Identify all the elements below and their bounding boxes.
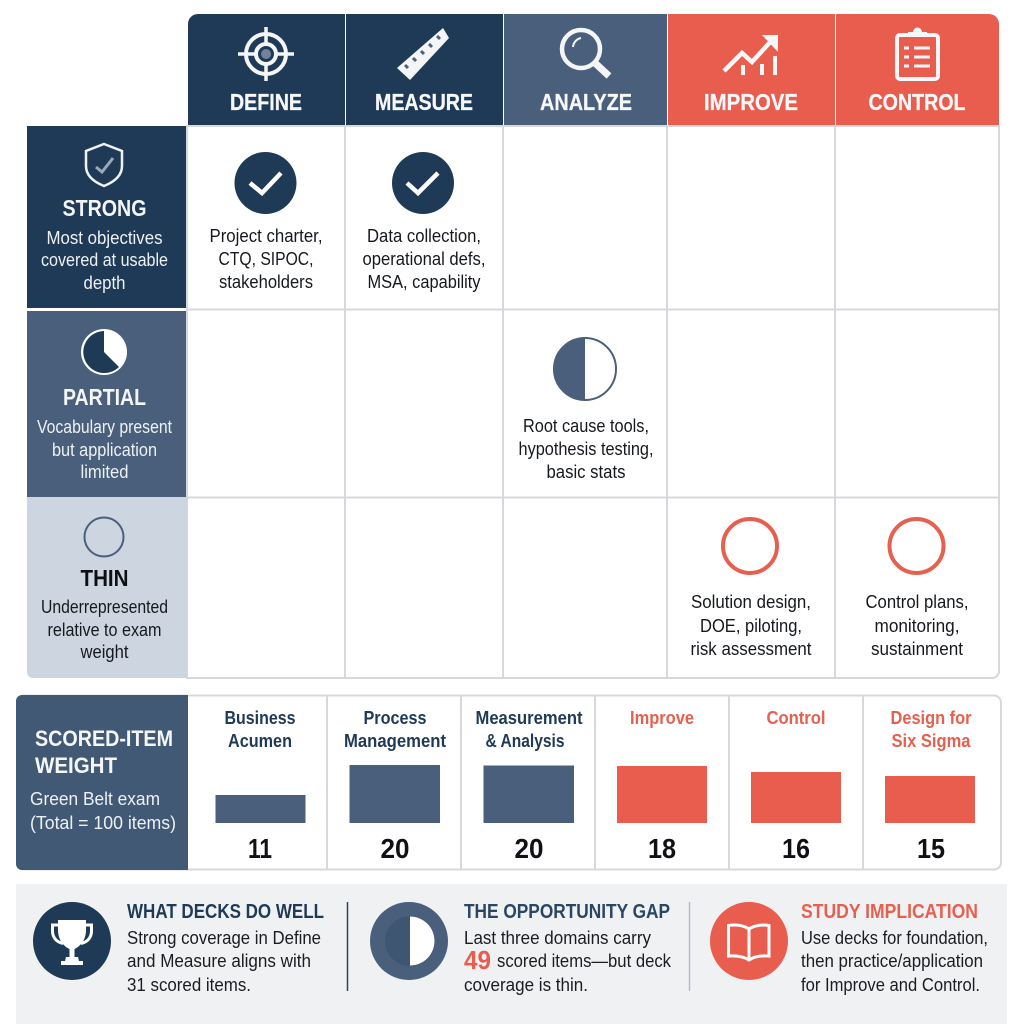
icon: shield [86,144,122,186]
header: control: CONTROL [868,89,966,115]
row label: strong: depth [84,273,126,293]
bar: design for six sigma [885,707,975,864]
bar: business acumen [216,707,306,864]
weight heading: Green Belt exam [30,789,160,809]
takeaway: what decks do well: Strong coverage in Define [127,927,321,948]
header: analyze [504,14,667,125]
weight heading [16,695,188,870]
icon: half circle [370,902,448,980]
bar: measurement and analysis: 20 [514,833,544,864]
takeaway: study implication [710,901,988,995]
cell: measure strong [362,152,486,292]
header row: DMAIC phases [188,14,999,125]
cell: measure strong: Data collection, [367,225,481,246]
row label: partial: limited [80,462,128,482]
bar: process management: 20 [380,833,410,864]
takeaway: the opportunity gap: THE OPPORTUNITY GAP [464,901,670,923]
cell: control thin [866,519,968,659]
cell: analyze partial: hypothesis testing, [518,438,654,459]
row label: thin: Underrepresented [41,596,168,617]
takeaway: the opportunity gap: Last three domains carry [464,927,652,948]
bar: improve: Improve [630,707,694,728]
bar: process management [344,707,446,864]
weight heading: SCORED-ITEM [35,726,173,751]
cell: control thin: sustainment [871,638,963,659]
bar: business acumen: 11 [248,833,272,864]
takeaway: what decks do well: WHAT DECKS DO WELL [127,901,324,923]
bar: design for six sigma: 15 [917,833,945,864]
bar: process management: Process [364,707,426,728]
takeaway: what decks do well: and Measure aligns with [127,950,311,971]
takeaway: study implication: Use decks for foundation, [801,927,988,948]
bar: measurement and analysis: Measurement [476,707,582,728]
header: improve: IMPROVE [704,89,798,115]
bar: improve: 18 [648,833,676,864]
bar: business acumen: Acumen [228,730,292,751]
cell: control thin: monitoring, [874,615,960,636]
header: measure: MEASURE [375,89,473,115]
takeaway: study implication: then practice/application [801,950,983,971]
bar: design for six sigma: Design for [890,707,972,728]
row label: thin [27,497,187,678]
weight heading: WEIGHT [35,753,117,778]
row label: partial [27,311,186,497]
cell: improve thin: Solution design, [691,591,811,612]
cell: define strong [210,152,322,292]
icon: trophy [33,902,111,980]
header: define [188,14,345,125]
row label: thin: THIN [80,565,128,591]
matrix grid [187,126,999,678]
cell: define strong: Project charter, [210,225,322,246]
header: improve [668,14,835,125]
panel: scored-item weight [16,695,1001,870]
takeaway: what decks do well: 31 scored items. [127,974,251,995]
row label: thin: weight [80,641,128,662]
bar: measurement and analysis [476,707,582,864]
takeaway: the opportunity gap: scored items—but deck [497,950,672,971]
cell: analyze partial [518,338,654,482]
row label: partial: but application [52,440,157,460]
panel: takeaways [16,884,1007,1024]
cell: analyze partial: Root cause tools, [523,415,649,436]
bar: control: 16 [782,833,810,864]
icon: three-quarter pie [81,329,127,375]
bar: control [751,707,841,864]
icon: open book [710,902,788,980]
takeaway: study implication: for Improve and Control. [801,974,980,995]
row label: partial: PARTIAL [63,384,146,410]
cell: define strong: CTQ, SIPOC, [218,248,314,269]
takeaway: what decks do well [33,901,324,995]
bar: design for six sigma: Six Sigma [892,730,971,751]
row label: strong: covered at usable [41,250,168,270]
header: define: DEFINE [230,89,302,115]
bar: control: Control [766,707,826,728]
takeaway: the opportunity gap: coverage is thin. [464,974,588,995]
takeaway: study implication: STUDY IMPLICATION [801,901,978,923]
header: measure [346,14,503,125]
cell: improve thin [690,519,812,659]
header: control [836,14,999,125]
cell: improve thin: risk assessment [690,638,812,659]
bar: measurement and analysis: & Analysis [486,730,564,751]
row label: strong: STRONG [62,195,146,221]
cell: control thin: Control plans, [866,591,968,612]
bar: improve [617,707,707,864]
cell: define strong: stakeholders [219,271,313,292]
header: analyze: ANALYZE [540,89,632,115]
takeaway: the opportunity gap [370,901,672,995]
row label: partial: Vocabulary present [37,417,172,437]
cell: improve thin: DOE, piloting, [700,615,802,636]
row label: thin: relative to exam [48,619,162,640]
cell: analyze partial: basic stats [546,461,626,482]
icon: empty circle [84,518,124,556]
row label: strong [27,126,186,308]
cell: measure strong: operational defs, [362,248,486,269]
weight heading: (Total = 100 items) [30,813,176,833]
row label: strong: Most objectives [46,228,162,248]
bar: business acumen: Business [224,707,296,728]
bar: process management: Management [344,730,446,751]
takeaway: the opportunity gap: 49 [464,945,491,975]
cell: measure strong: MSA, capability [368,271,481,292]
